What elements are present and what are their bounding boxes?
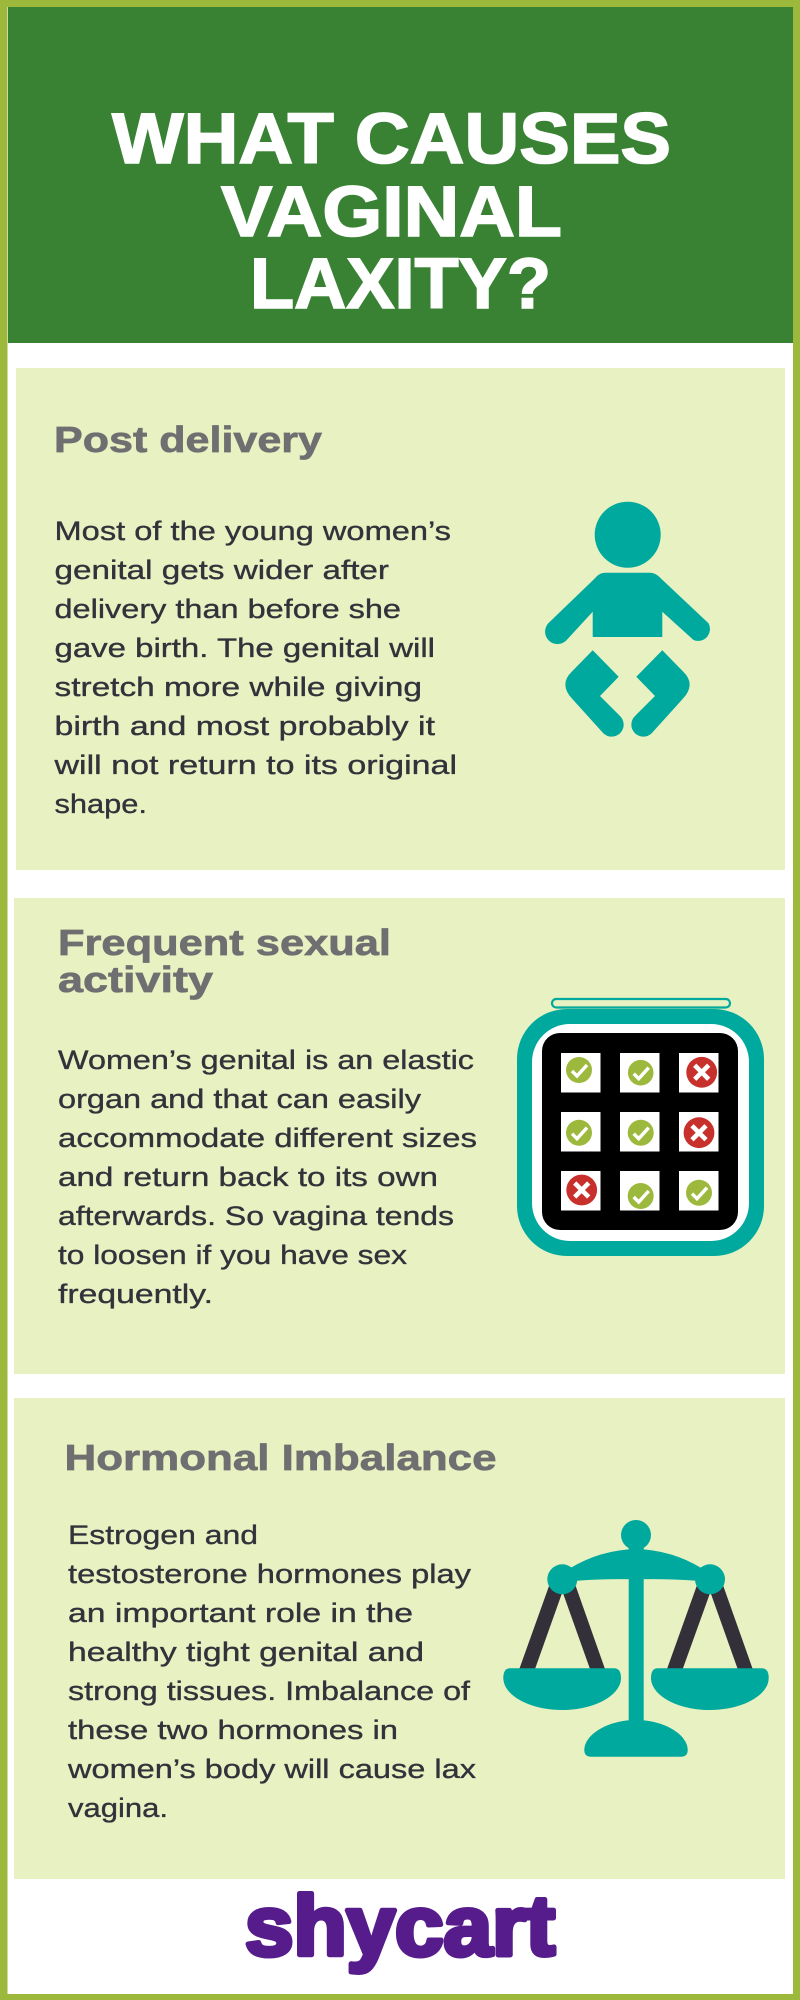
text: post delivery body	[53, 516, 457, 819]
text: hormonal imbalance body: healthy tight genital and	[68, 1637, 424, 1667]
text: post delivery body: shape.	[54, 789, 147, 819]
text: post delivery body: Most of the young women’s	[54, 516, 451, 546]
heading: frequent sexual activity	[58, 922, 391, 1000]
text: hormonal imbalance body	[67, 1520, 477, 1823]
text: post delivery body: genital gets wider after	[54, 555, 389, 585]
text: hormonal imbalance body: testosterone hormones play	[68, 1559, 472, 1589]
text: post delivery body: gave birth. The genital will	[54, 633, 435, 663]
text: hormonal imbalance body: Estrogen and	[68, 1520, 258, 1550]
icon: calendar checklist	[517, 999, 764, 1256]
heading: frequent sexual activity: activity	[58, 959, 213, 1000]
text: frequent sexual activity body: Women’s genital is an elastic	[58, 1045, 474, 1075]
text: hormonal imbalance body: these two hormones in	[68, 1715, 398, 1745]
text: frequent sexual activity body: organ and that can easily	[58, 1084, 422, 1114]
panel: frequent sexual activity	[14, 898, 785, 1374]
text: hormonal imbalance body: women’s body will cause lax	[67, 1754, 477, 1784]
text: post delivery body: will not return to its original	[53, 750, 457, 780]
title	[112, 100, 671, 324]
icon: balance scale	[503, 1520, 769, 1757]
text: frequent sexual activity body: to loosen if you have sex	[58, 1240, 408, 1270]
logo: shycart: shycart	[245, 1879, 555, 1973]
text: frequent sexual activity body: and return back to its own	[58, 1162, 438, 1192]
title: WHAT CAUSES	[112, 100, 671, 179]
text: hormonal imbalance body: an important role in the	[68, 1598, 413, 1628]
text: hormonal imbalance body: strong tissues. Imbalance of	[68, 1676, 471, 1706]
text: frequent sexual activity body: frequently.	[58, 1279, 213, 1309]
heading: post delivery: Post delivery	[54, 419, 322, 460]
title: VAGINAL	[221, 173, 562, 252]
text: post delivery body: birth and most probably it	[54, 711, 436, 741]
title banner	[8, 7, 793, 343]
text: post delivery body: delivery than before she	[54, 594, 401, 624]
text: frequent sexual activity body	[58, 1045, 477, 1309]
icon: baby	[545, 502, 710, 737]
panel: post delivery	[16, 368, 785, 870]
text: hormonal imbalance body: vagina.	[68, 1793, 168, 1823]
text: frequent sexual activity body: afterwards. So vagina tends	[58, 1201, 454, 1231]
text: frequent sexual activity body: accommodate different sizes	[58, 1123, 477, 1153]
panel: hormonal imbalance	[14, 1398, 785, 1879]
title: LAXITY?	[250, 245, 551, 324]
heading: frequent sexual activity: Frequent sexual	[58, 922, 391, 963]
text: post delivery body: stretch more while giving	[54, 672, 422, 702]
heading: hormonal imbalance: Hormonal Imbalance	[64, 1437, 496, 1478]
